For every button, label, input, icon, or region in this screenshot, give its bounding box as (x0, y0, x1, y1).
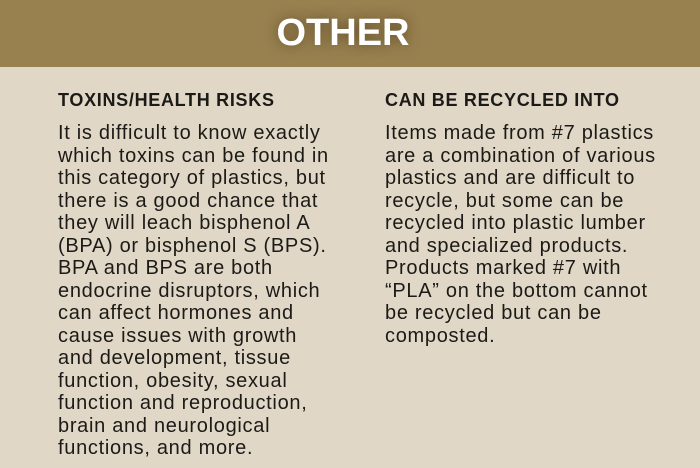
text block: toxins: and development, tissue (58, 347, 291, 369)
text block: toxins: brain and neurological (58, 414, 270, 436)
panel: can be recycled into (385, 90, 656, 346)
text block: toxins (58, 122, 329, 459)
text block: toxins: can affect hormones and (58, 302, 294, 324)
text block: toxins: functions, and more. (58, 437, 253, 459)
text block: recycled: composted. (385, 324, 495, 346)
text block: toxins: function, obesity, sexual (58, 370, 287, 392)
text block: recycled: Items made from #7 plastics (385, 122, 654, 144)
text block: recycled: “PLA” on the bottom cannot (385, 280, 648, 302)
text block: recycled: be recycled but can be (385, 302, 602, 324)
text block: toxins: they will leach bisphenol A (58, 212, 310, 234)
heading: toxins: TOXINS/HEALTH RISKS (58, 90, 275, 110)
text block: recycled: and specialized products. (385, 234, 628, 256)
header bar (0, 0, 700, 67)
text block: toxins: which toxins can be found in (58, 144, 329, 166)
text block: toxins: cause issues with growth (58, 324, 297, 346)
text block: recycled: recycled into plastic lumber (385, 212, 646, 234)
text block: recycled: are a combination of various (385, 144, 656, 166)
text block: toxins: (BPA) or bisphenol S (BPS). (58, 234, 327, 256)
text block: toxins: It is difficult to know exactly (58, 122, 321, 144)
text block: toxins: there is a good chance that (58, 190, 318, 212)
heading: recycled: CAN BE RECYCLED INTO (385, 90, 620, 110)
text block: recycled: Products marked #7 with (385, 257, 621, 279)
text block: toxins: function and reproduction, (58, 392, 307, 414)
text block: recycled (385, 122, 656, 346)
text block: recycled: plastics and are difficult to (385, 167, 635, 189)
text block: toxins: endocrine disruptors, which (58, 280, 320, 302)
panel: toxins/health risks (58, 90, 329, 459)
text block: toxins: BPA and BPS are both (58, 257, 273, 279)
title: OTHER (276, 12, 410, 54)
text block: toxins: this category of plastics, but (58, 167, 326, 189)
text block: recycled: recycle, but some can be (385, 190, 624, 212)
